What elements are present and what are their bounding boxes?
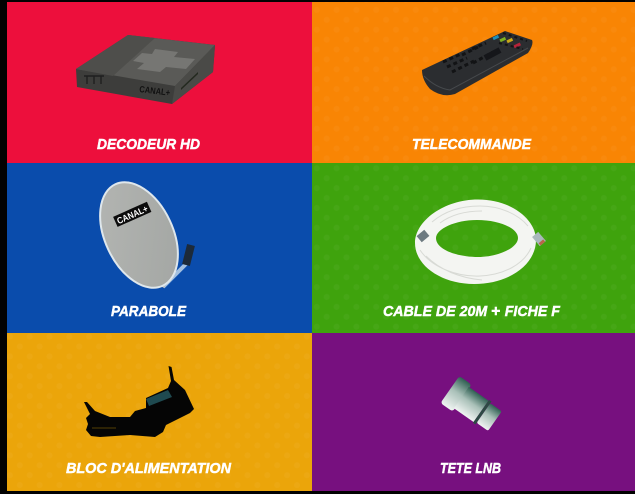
icon: right connector [532,232,546,246]
icon: LNB head [440,376,504,435]
panel: decodeur HD [7,2,312,163]
panel: telecommande [312,2,635,163]
icon: coiled white cable [415,200,546,284]
panel: cable [312,163,635,333]
panel: parabole [7,163,312,333]
icon: decoder box [76,35,215,104]
label: decodeur HD: DECODEUR HD [97,137,201,153]
logo: CANAL+ sticker: CANAL+ [115,204,150,226]
label: telecommande: TELECOMMANDE [412,137,532,153]
icon: left connector [417,230,429,242]
label: bloc d'alimentation: BLOC D'ALIMENTATION [66,461,232,477]
panel: tete LNB [312,333,635,491]
label: tete LNB: TETE LNB [440,461,501,477]
icon: remote control [422,31,532,95]
icon: power adapter [84,366,194,437]
label: parabole: PARABOLE [111,304,187,320]
logo text: CANAL+ on decoder: CANAL+ [139,84,171,98]
icon: satellite dish [85,170,193,300]
panel: bloc d'alimentation [7,333,312,491]
label: cable de 20m + fiche F: CABLE DE 20M + FICHE F [383,303,561,320]
